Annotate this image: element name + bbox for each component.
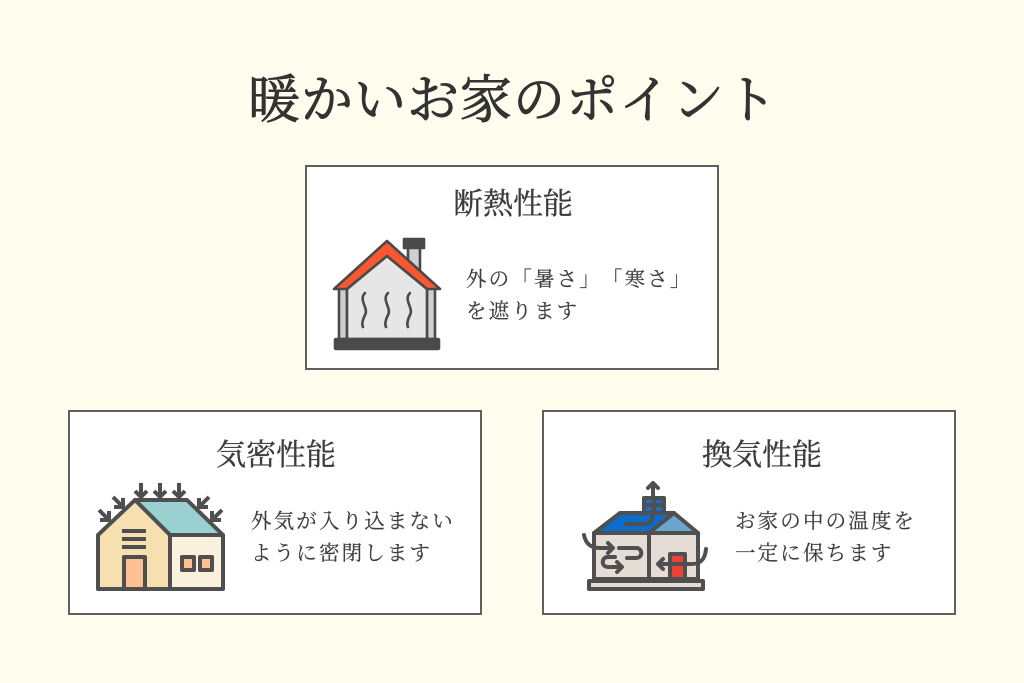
text: ventilation: お家の中の温度を	[735, 511, 916, 533]
text: airtightness: 外気が入り込まない	[251, 511, 455, 533]
title: 暖かいお家のポイント	[248, 73, 778, 130]
heading: insulation: 断熱性能	[453, 188, 573, 221]
text: insulation: 外の「暑さ」「寒さ」	[466, 269, 692, 291]
text: ventilation	[735, 510, 916, 565]
heading: airtightness: 気密性能	[216, 439, 336, 472]
heading: ventilation: 換気性能	[702, 439, 822, 472]
text: insulation: を遮ります	[466, 301, 579, 323]
icon: insulated house	[332, 238, 442, 350]
icon: airtight house	[96, 483, 226, 591]
panel: airtightness	[68, 410, 482, 615]
text: airtightness: ように密閉します	[251, 543, 432, 565]
text: airtightness	[251, 510, 455, 565]
panel: ventilation	[542, 410, 956, 615]
icon: ventilated house	[582, 480, 708, 591]
text: ventilation: 一定に保ちます	[735, 543, 894, 565]
panel: insulation	[305, 165, 719, 370]
text: insulation	[466, 268, 692, 323]
